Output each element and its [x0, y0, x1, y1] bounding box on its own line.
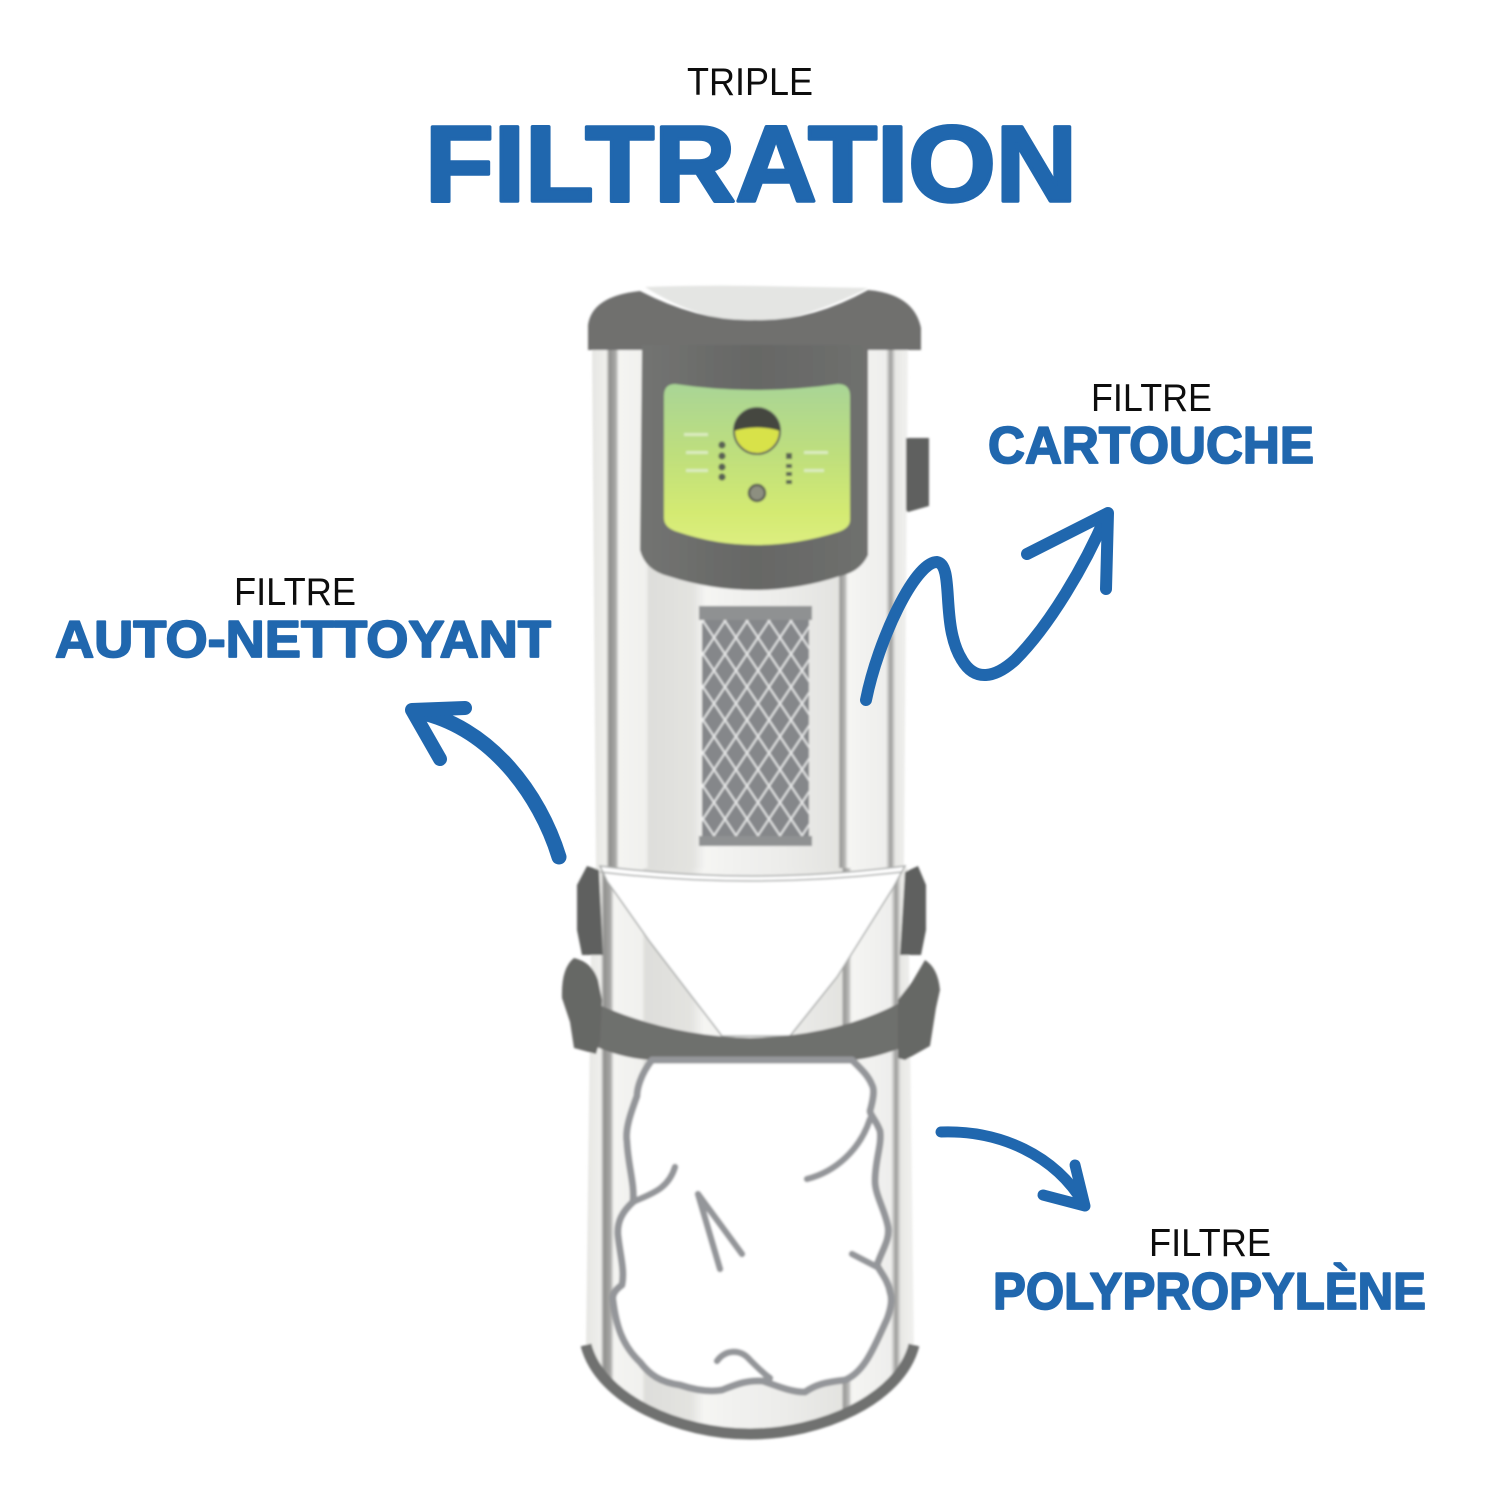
title line: FILTRATION: FILTRATION	[425, 103, 1077, 224]
panel button	[749, 485, 765, 501]
logo badge	[734, 408, 780, 454]
clamp band	[580, 996, 906, 1060]
label: FILTRE AUTO-NETTOYANT	[55, 571, 551, 669]
indicator lights left	[718, 441, 726, 481]
polypropylene bag	[613, 1060, 891, 1392]
upper latch left	[577, 866, 603, 955]
indicator lights right	[786, 453, 792, 484]
label: FILTRE AUTO-NETTOYANT: AUTO-NETTOYANT	[55, 611, 551, 669]
glass top of lid	[645, 286, 868, 322]
top cap	[699, 606, 812, 620]
green screen	[664, 384, 850, 545]
side switch	[906, 438, 929, 512]
central vacuum illustration	[562, 286, 940, 1436]
bag creases	[633, 1119, 877, 1378]
bottom cap	[699, 836, 812, 846]
green control panel	[664, 384, 850, 545]
label: FILTRE CARTOUCHE: FILTRE	[1091, 377, 1212, 420]
faint panel labels	[684, 433, 828, 472]
cartridge filter	[699, 606, 812, 846]
label: FILTRE AUTO-NETTOYANT: FILTRE	[234, 571, 356, 614]
arrow: to cartridge label	[866, 513, 1108, 700]
label: FILTRE POLYPROPYLÈNE: POLYPROPYLÈNE	[993, 1263, 1426, 1321]
label: FILTRE POLYPROPYLÈNE: FILTRE	[1149, 1222, 1271, 1265]
self-cleaning funnel filter	[600, 866, 905, 1036]
control panel housing	[640, 345, 868, 590]
title	[425, 61, 1077, 224]
clamp left	[562, 958, 602, 1054]
arrow: to self-cleaning label	[412, 708, 559, 857]
clamp right	[898, 960, 940, 1060]
label: FILTRE CARTOUCHE: CARTOUCHE	[988, 417, 1314, 475]
title line: TRIPLE: TRIPLE	[687, 61, 813, 104]
mesh	[702, 618, 809, 840]
lid	[588, 286, 921, 350]
upper body	[592, 345, 908, 868]
bucket base ring	[586, 1345, 914, 1434]
label: FILTRE POLYPROPYLÈNE	[993, 1222, 1426, 1321]
grey lid shell	[588, 290, 921, 350]
upper latch right	[900, 866, 926, 955]
bag fill	[613, 1060, 891, 1392]
label: FILTRE CARTOUCHE	[988, 377, 1314, 475]
arrow: to polypropylene label	[941, 1132, 1085, 1206]
lower bucket	[586, 868, 914, 1436]
